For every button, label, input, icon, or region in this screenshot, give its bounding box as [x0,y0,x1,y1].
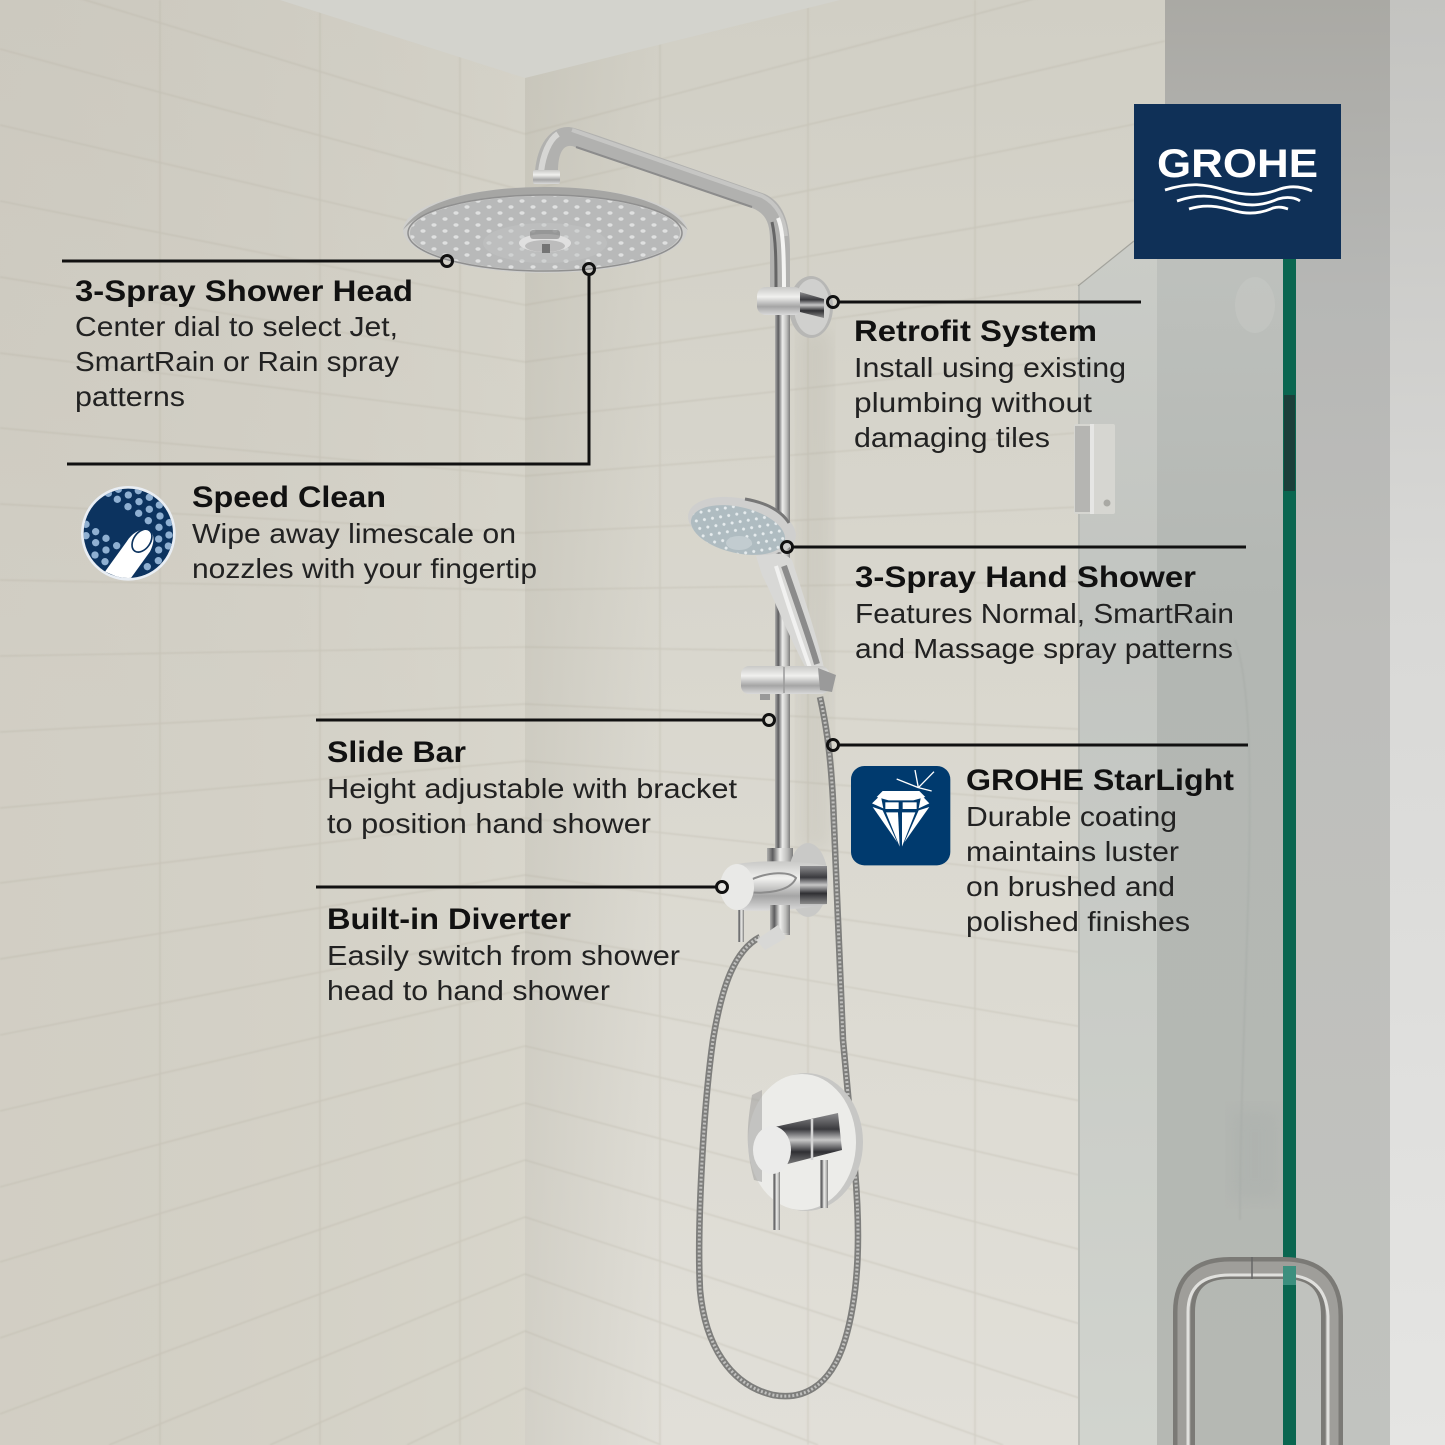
callout: Speed Clean: Wipe away limescale on [192,518,516,549]
logo: GROHE [1134,104,1341,259]
callout: Retrofit System: Retrofit System [854,315,1097,348]
soft shadow of shower rail [798,330,832,850]
callout: 3-Spray Hand Shower: and Massage spray patterns [855,633,1233,664]
callout: Speed Clean [67,264,594,584]
callout: Retrofit System [828,296,1141,453]
leader line [782,542,1246,552]
valve trim plate and handle [748,1073,863,1230]
callout: Built-in Diverter: head to hand shower [327,975,610,1006]
flexible hose [699,697,858,1396]
leader line [316,714,774,726]
leader line [67,264,594,464]
leader line [828,296,1141,308]
callout: 3-Spray Shower Head: SmartRain or Rain spray [75,346,399,377]
callout: Slide Bar: to position hand shower [327,808,651,839]
callout: 3-Spray Hand Shower: 3-Spray Hand Shower [855,561,1196,594]
callout: Slide Bar: Slide Bar [327,736,466,769]
callout: Speed Clean: Speed Clean [192,481,386,514]
hand shower [682,487,824,672]
leader line [62,256,452,266]
overhead shower head [403,187,688,273]
callout: GROHE StarLight: on brushed and [966,871,1175,902]
callout: 3-Spray Shower Head: patterns [75,381,185,412]
callout: 3-Spray Hand Shower [782,542,1246,664]
callout: 3-Spray Shower Head [62,256,452,412]
shower arm [533,127,790,290]
wall bracket [757,276,833,338]
logo: GROHE: GROHE [1157,142,1318,186]
callout: Built-in Diverter: Built-in Diverter [327,903,571,936]
callout: 3-Spray Shower Head: 3-Spray Shower Head [75,275,413,308]
glass door edge strip [1283,258,1296,1445]
callout: GROHE StarLight: GROHE StarLight [966,764,1234,797]
callout: Slide Bar: Height adjustable with bracket [327,773,737,804]
leader line [828,740,1248,750]
leader line [316,882,728,892]
door pull handle [1184,1257,1332,1445]
callout: GROHE StarLight: maintains luster [966,836,1179,867]
callout: Built-in Diverter: Easily switch from shower [327,940,680,971]
callout: Retrofit System: damaging tiles [854,422,1050,453]
slider bracket [741,666,836,700]
icon: diamond [851,766,950,865]
callout: Speed Clean: nozzles with your fingertip [192,553,537,584]
callout: 3-Spray Hand Shower: Features Normal, SmartRain [855,598,1234,629]
shower rail [772,250,790,935]
callout: 3-Spray Shower Head: Center dial to select Jet, [75,311,398,342]
callout: Retrofit System: plumbing without [854,387,1092,418]
built-in diverter [720,843,828,950]
callout: Built-in Diverter [316,882,728,1006]
icon: fingertip on nozzles [81,486,176,582]
callout: GROHE StarLight: polished finishes [966,906,1190,937]
callout: GROHE StarLight [828,740,1248,937]
callout: Slide Bar [316,714,774,839]
callout: GROHE StarLight: Durable coating [966,801,1177,832]
callout: Retrofit System: Install using existing [854,352,1126,383]
wall hinge seen through glass [1074,424,1115,514]
